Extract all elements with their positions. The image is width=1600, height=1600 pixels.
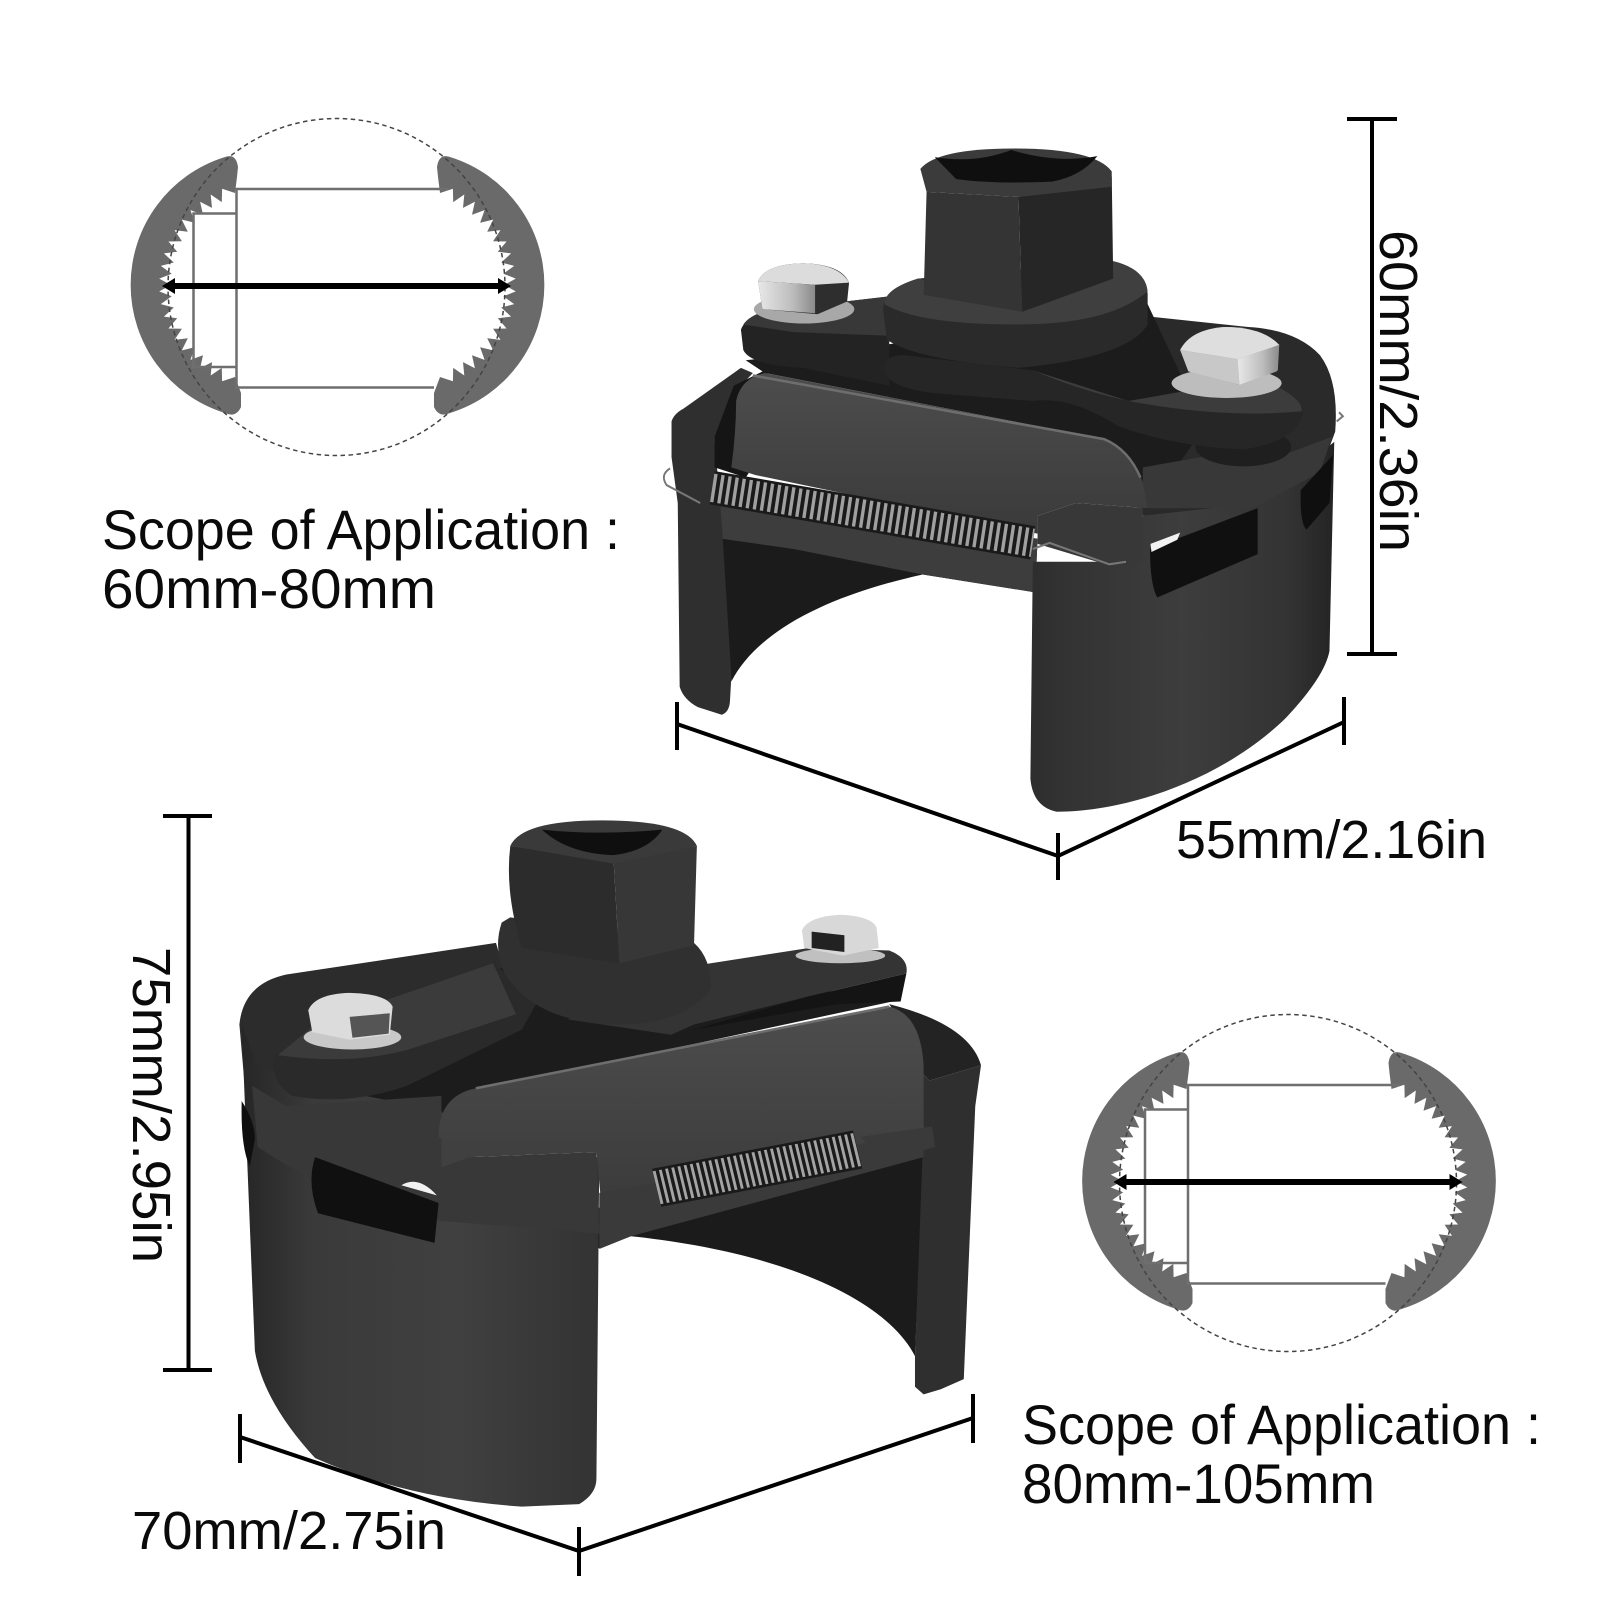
right arm top face (1033, 370, 1302, 414)
collar (498, 917, 711, 1025)
socket left face (924, 192, 1022, 312)
left arm (273, 963, 539, 1099)
socket hole (542, 830, 662, 855)
right body (1030, 442, 1334, 812)
label: 60mm/2.36in (1368, 230, 1428, 552)
socket top (920, 148, 1112, 197)
socket hole (935, 150, 1097, 182)
icon: right gripping jaw (434, 156, 544, 415)
icon: right gripping jaw (1386, 1052, 1496, 1311)
arrow: diameter (1114, 1174, 1462, 1190)
right arm (568, 948, 907, 1035)
window slot (1150, 508, 1258, 597)
text: scope of application 80-105mm (1022, 1393, 1541, 1515)
right bolt washer (1172, 368, 1282, 398)
dark recess behind plate (715, 370, 794, 478)
text: scope of application 80-105mm: 80mm-105mm (1022, 1452, 1375, 1515)
dimension: width 70mm (132, 1394, 973, 1576)
plate highlight (476, 1007, 889, 1088)
top rear plate (239, 943, 522, 1137)
left arm top face (278, 963, 516, 1059)
icon: left gripping jaw (131, 156, 241, 415)
left bolt (758, 263, 849, 314)
window slot (311, 1157, 439, 1243)
socket left face (509, 846, 619, 963)
socket top (510, 820, 697, 864)
dimension line (1347, 119, 1397, 654)
lower band (599, 1132, 924, 1249)
diagram: scope of application 80-105mm (1082, 1014, 1496, 1352)
right arm (884, 355, 1303, 449)
dimension: height 60mm (1347, 119, 1428, 654)
window slot highlight (401, 1182, 437, 1195)
left bolt washer (304, 1025, 401, 1049)
spring tabs (599, 1127, 935, 1234)
product: small wrench (664, 148, 1343, 812)
right arm disc (1195, 428, 1291, 466)
product: large wrench (239, 820, 981, 1507)
diagram: scope of application 60-80mm (131, 118, 544, 456)
spring (712, 488, 1033, 543)
dimension line (677, 697, 1344, 880)
right bolt washer (796, 948, 885, 963)
filter outline rectangles (1145, 1085, 1400, 1284)
label: 70mm/2.75in (132, 1501, 446, 1561)
window slot highlight (1151, 533, 1180, 552)
left arm (741, 296, 889, 386)
right arm under (694, 973, 906, 1030)
side slot (1301, 455, 1333, 530)
dimension: height 75mm (121, 816, 212, 1370)
dimension line (163, 816, 212, 1370)
label: 55mm/2.16in (1176, 810, 1487, 870)
right shell (889, 1004, 981, 1081)
front plate (439, 1007, 924, 1213)
text: scope of application 60-80mm: Scope of Application : (102, 498, 620, 561)
body shoulder (252, 1086, 599, 1234)
collar ledge (1038, 437, 1332, 567)
front plate (731, 373, 1148, 534)
top plate (1081, 314, 1336, 516)
text: scope of application 60-80mm (102, 498, 620, 620)
side slot (242, 1101, 255, 1166)
lower band (717, 493, 1038, 592)
spring wires (664, 412, 1343, 564)
right bolt (1180, 327, 1279, 385)
left arm top (743, 296, 889, 336)
left body (242, 1024, 599, 1507)
text: scope of application 60-80mm: 60mm-80mm (102, 557, 436, 620)
flange top (884, 261, 1148, 324)
flange (883, 261, 1148, 368)
filter outline rectangles (194, 189, 448, 388)
socket right face (1018, 177, 1113, 312)
plate highlight (753, 376, 1140, 478)
dashed circle (168, 118, 505, 456)
dark backing under arms (292, 968, 892, 1152)
left bolt (308, 993, 393, 1040)
right bolt (802, 915, 879, 956)
left bolt washer (754, 295, 854, 323)
right leg (906, 1065, 981, 1394)
left leg (672, 368, 753, 715)
spring (657, 1149, 858, 1188)
label: 75mm/2.95in (121, 947, 181, 1263)
wrench back wall (717, 493, 1038, 682)
dimension: width 55mm (677, 697, 1487, 880)
dark backing under arms (746, 304, 1205, 508)
icon: left gripping jaw (1082, 1052, 1192, 1311)
dashed circle (1120, 1014, 1456, 1352)
socket right face (614, 846, 697, 963)
text: scope of application 80-105mm: Scope of Application : (1022, 1393, 1541, 1456)
arrow: diameter (162, 278, 511, 294)
wrench back wall (596, 1157, 924, 1356)
dimension line (240, 1394, 973, 1576)
